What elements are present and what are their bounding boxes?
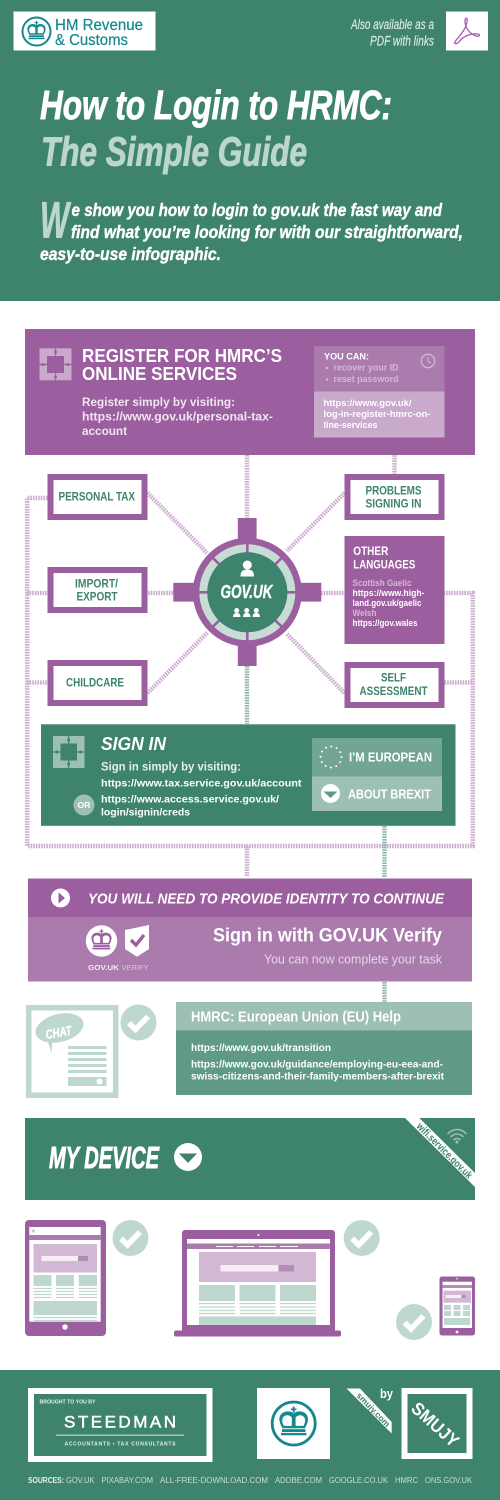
footer background: [0, 1370, 500, 1500]
intro paragraph: find what you’re looking for with our straightforward,: [71, 222, 463, 242]
ribbon: wifi.service.gov.uk: [413, 1120, 475, 1182]
box: self assessment: ASSESSMENT: [360, 684, 428, 698]
sources: GOV.UK: [66, 1476, 95, 1485]
box: childcare: [50, 663, 144, 703]
box: self assessment: [348, 665, 442, 705]
panel: other languages: [344, 536, 444, 644]
panel: register: [25, 329, 475, 455]
pdf note: Also available as a: [350, 17, 434, 32]
ribbon: smujy.com: smujy.com: [355, 1390, 393, 1429]
panel: eu help: [176, 1002, 472, 1095]
box: import export: IMPORT/: [75, 576, 119, 590]
check: tablet: [112, 1220, 148, 1256]
pdf note: [350, 17, 434, 48]
ribbon: smujy.com: [346, 1388, 393, 1434]
logo: HM Revenue and Customs: [14, 12, 156, 50]
sign in text: [101, 762, 302, 818]
logo: steedman: BROUGHT TO YOU BY: [40, 1399, 96, 1405]
panel: eu help: swiss-citizens-and-their-family-members-after-brexit: [191, 1071, 444, 1083]
box: import export: [50, 570, 144, 610]
logo: steedman: [31, 1391, 210, 1459]
heading: [82, 346, 282, 384]
logo: HM Revenue and Customs: & Customs: [55, 32, 128, 49]
icon: pdf: [446, 12, 488, 50]
hub: gov.uk: GOV.UK: [220, 582, 274, 602]
button: about brexit: ABOUT BREXIT: [348, 786, 431, 801]
sources: PIXABAY.COM: [102, 1476, 153, 1485]
you can box: [314, 346, 444, 392]
logo: steedman: STEEDMAN: [64, 1413, 176, 1432]
icon: down arrow: [174, 1143, 202, 1171]
panel: other languages: https://gov.wales: [352, 618, 418, 628]
heading: MY DEVICE: [49, 1140, 160, 1175]
sources: SOURCES:: [28, 1476, 64, 1485]
icon: chat: CHAT: [44, 1023, 73, 1042]
button: i'm european: I’M EUROPEAN: [349, 750, 432, 765]
sources: HMRC: [395, 1476, 418, 1485]
panel: sign in: [41, 724, 456, 826]
sign in text: https://www.access.service.gov.uk/: [101, 794, 279, 806]
sign in text: https://www.tax.service.gov.uk/account: [101, 778, 302, 790]
sign in text: Sign in simply by visiting:: [101, 762, 241, 774]
icon: puzzle: [39, 348, 72, 381]
box: problems signing in: PROBLEMS: [366, 483, 422, 497]
sources: GOOGLE.CO.UK: [329, 1476, 389, 1485]
box: self assessment: SELF: [381, 671, 406, 685]
connectors: [27, 437, 473, 1002]
or badge: [74, 794, 94, 816]
icon: shield: [125, 925, 149, 957]
panel: eu help: HMRC: European Union (EU) Help: [191, 1009, 401, 1025]
hub: gov.uk: [173, 518, 321, 666]
icon: puzzle: [53, 736, 84, 768]
link box: line-services: [324, 420, 378, 431]
heading: YOU WILL NEED TO PROVIDE IDENTITY TO CONTINUE: [88, 890, 445, 907]
you can box: recover your ID: [334, 363, 399, 374]
box: personal tax: PERSONAL TAX: [58, 490, 135, 504]
link box: log-in-register-hmrc-on-: [324, 409, 430, 420]
you can box: reset password: [334, 374, 399, 385]
panel: other languages: LANGUAGES: [353, 557, 415, 571]
title: The Simple Guide: [41, 128, 307, 174]
ribbon: [405, 1118, 475, 1187]
device: tablet: [25, 1220, 106, 1336]
verify subtext: You can now complete your task: [264, 953, 443, 967]
panel: other languages: Welsh: [352, 608, 376, 618]
logo: steedman: ACCOUNTANTS • TAX CONSULTANTS: [64, 1442, 176, 1448]
intro paragraph: [40, 192, 463, 264]
device: laptop: [174, 1230, 341, 1336]
icon: person: [240, 560, 254, 576]
icon: play: [51, 888, 70, 908]
panel: other languages: Scottish Gaelic: [352, 578, 412, 588]
button: i'm european: [312, 738, 442, 776]
check: phone: [396, 1304, 432, 1340]
panel: eu help: https://www.gov.uk/transition: [191, 1042, 331, 1054]
heading: SIGN IN: [101, 734, 167, 754]
box: personal tax: [50, 477, 144, 517]
icon: verify crown: [86, 925, 117, 957]
verify label: VERIFY: [122, 963, 148, 972]
register text: Register simply by visiting:: [82, 395, 235, 409]
sign in text: login/signin/creds: [101, 806, 190, 818]
intro paragraph: W: [40, 192, 71, 248]
logo: smujy: SMUJY: [407, 1398, 463, 1451]
panel: other languages: OTHER: [353, 544, 389, 558]
check: laptop: [344, 1220, 380, 1256]
icon: people: [233, 608, 260, 617]
heading: REGISTER FOR HMRC’S: [82, 346, 282, 366]
title: [40, 82, 392, 174]
box: problems signing in: [348, 477, 442, 517]
logo: HM Revenue and Customs: HM Revenue: [55, 17, 143, 34]
box: problems signing in: SIGNING IN: [366, 497, 422, 511]
icon: chat: [29, 1008, 116, 1095]
sources: ALL-FREE-DOWNLOAD.COM: [160, 1476, 268, 1485]
header background: [0, 0, 500, 301]
panel: other languages: land.gov.uk/gaelic: [352, 598, 422, 608]
verify label: GOV.UK: [88, 963, 120, 972]
panel: identity: [28, 878, 472, 982]
heading: ONLINE SERVICES: [82, 364, 237, 384]
intro paragraph: easy-to-use infographic.: [40, 244, 221, 264]
verify heading: Sign in with GOV.UK Verify: [213, 925, 442, 947]
sources: [28, 1476, 473, 1485]
verify label: [88, 963, 148, 972]
register text: [82, 395, 273, 438]
you can box: YOU CAN:: [324, 352, 369, 362]
intro paragraph: e show you how to login to gov.uk the fast way and: [72, 200, 442, 220]
panel: other languages: https://www.high-: [352, 588, 424, 598]
box: childcare: CHILDCARE: [66, 676, 124, 690]
by label: by: [380, 1386, 394, 1401]
sources: ONS.GOV.UK: [425, 1476, 473, 1485]
check: chat: [120, 1004, 156, 1040]
link box: [314, 392, 444, 438]
box: import export: EXPORT: [76, 590, 118, 604]
or badge: OR: [78, 800, 90, 810]
pdf note: PDF with links: [370, 34, 434, 48]
logo: crown: [257, 1388, 330, 1459]
link box: https://www.gov.uk/: [324, 398, 412, 409]
button: about brexit: [312, 776, 442, 811]
panel: eu help: https://www.gov.uk/guidance/employing-eu-eea-and-: [191, 1059, 443, 1071]
sources: ADOBE.COM: [275, 1476, 322, 1485]
panel: my device: [25, 1118, 475, 1200]
register text: https://www.gov.uk/personal-tax-: [82, 410, 273, 424]
device: phone: [440, 1276, 475, 1336]
title: How to Login to HRMC:: [40, 82, 392, 128]
icon: wifi: [448, 1130, 466, 1143]
register text: account: [82, 424, 127, 438]
